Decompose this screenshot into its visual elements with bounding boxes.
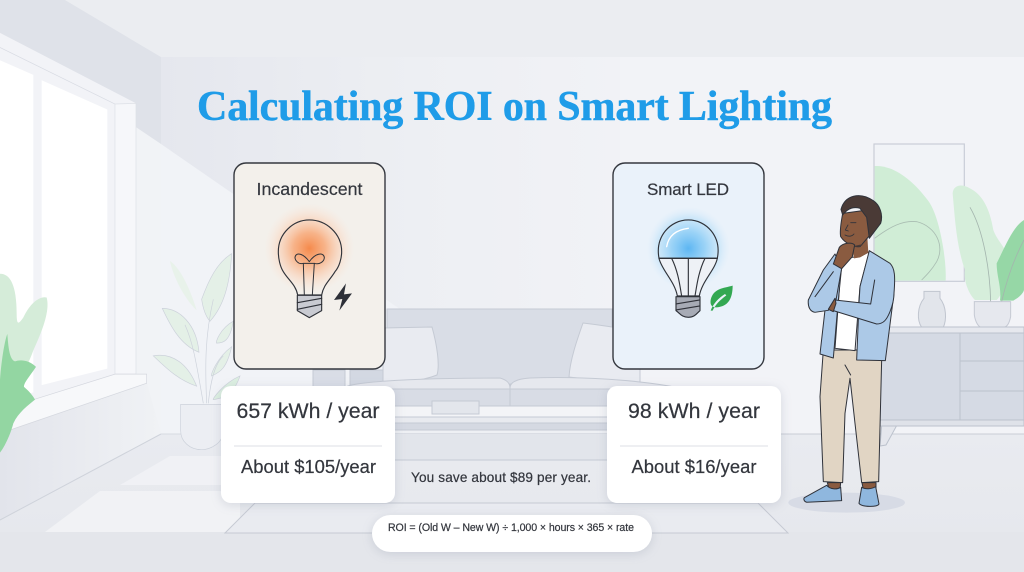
- usage value: 657 kWh / year: [236, 399, 380, 423]
- trousers: [820, 350, 882, 483]
- icon: lightning bolt: [334, 283, 352, 311]
- icon: leaf: [711, 286, 733, 311]
- plant: left foreground: [0, 274, 48, 453]
- formula text: ROI = (Old W – New W) ÷ 1,000 × hours × 365 × rate: [388, 522, 634, 534]
- panel: incandescent: [234, 163, 385, 369]
- rug: [225, 503, 788, 533]
- sofa: [313, 309, 680, 406]
- heading: smart LED: Smart LED: [647, 180, 729, 199]
- dresser: [878, 327, 1024, 446]
- icon: incandescent bulb: [264, 203, 354, 318]
- plant and vase on dresser: [918, 186, 1024, 327]
- beard line: [854, 245, 862, 247]
- stat card: smart LED: [607, 386, 781, 503]
- shirt: [835, 252, 869, 351]
- facial features: [845, 223, 856, 236]
- heading: incandescent: Incandescent: [256, 179, 363, 199]
- shadow: [788, 493, 905, 513]
- icon: LED bulb: [647, 207, 730, 317]
- face: [840, 210, 870, 247]
- crossed arm: [833, 280, 894, 324]
- formula pill: [372, 515, 652, 552]
- usage value: 98 kWh / year: [628, 399, 760, 423]
- left arm: [808, 254, 842, 312]
- savings text: You save about $89 per year.: [411, 470, 591, 485]
- person: [788, 196, 905, 513]
- picture frame: [874, 144, 964, 281]
- window: [0, 33, 147, 434]
- hair: [841, 196, 882, 238]
- plant: background pot beside card: [153, 254, 240, 450]
- coffee table: [385, 401, 615, 460]
- stat card: incandescent: [221, 386, 395, 503]
- panel: smart LED: [613, 163, 764, 369]
- title: Calculating ROI on Smart Lighting: [197, 84, 832, 130]
- shoes: [827, 483, 876, 490]
- cardigan: [820, 255, 842, 358]
- hand at chin: [833, 243, 855, 269]
- cost value: About $105/year: [241, 456, 376, 477]
- neck: [852, 237, 868, 258]
- cost value: About $16/year: [632, 456, 756, 477]
- hand: [828, 298, 836, 312]
